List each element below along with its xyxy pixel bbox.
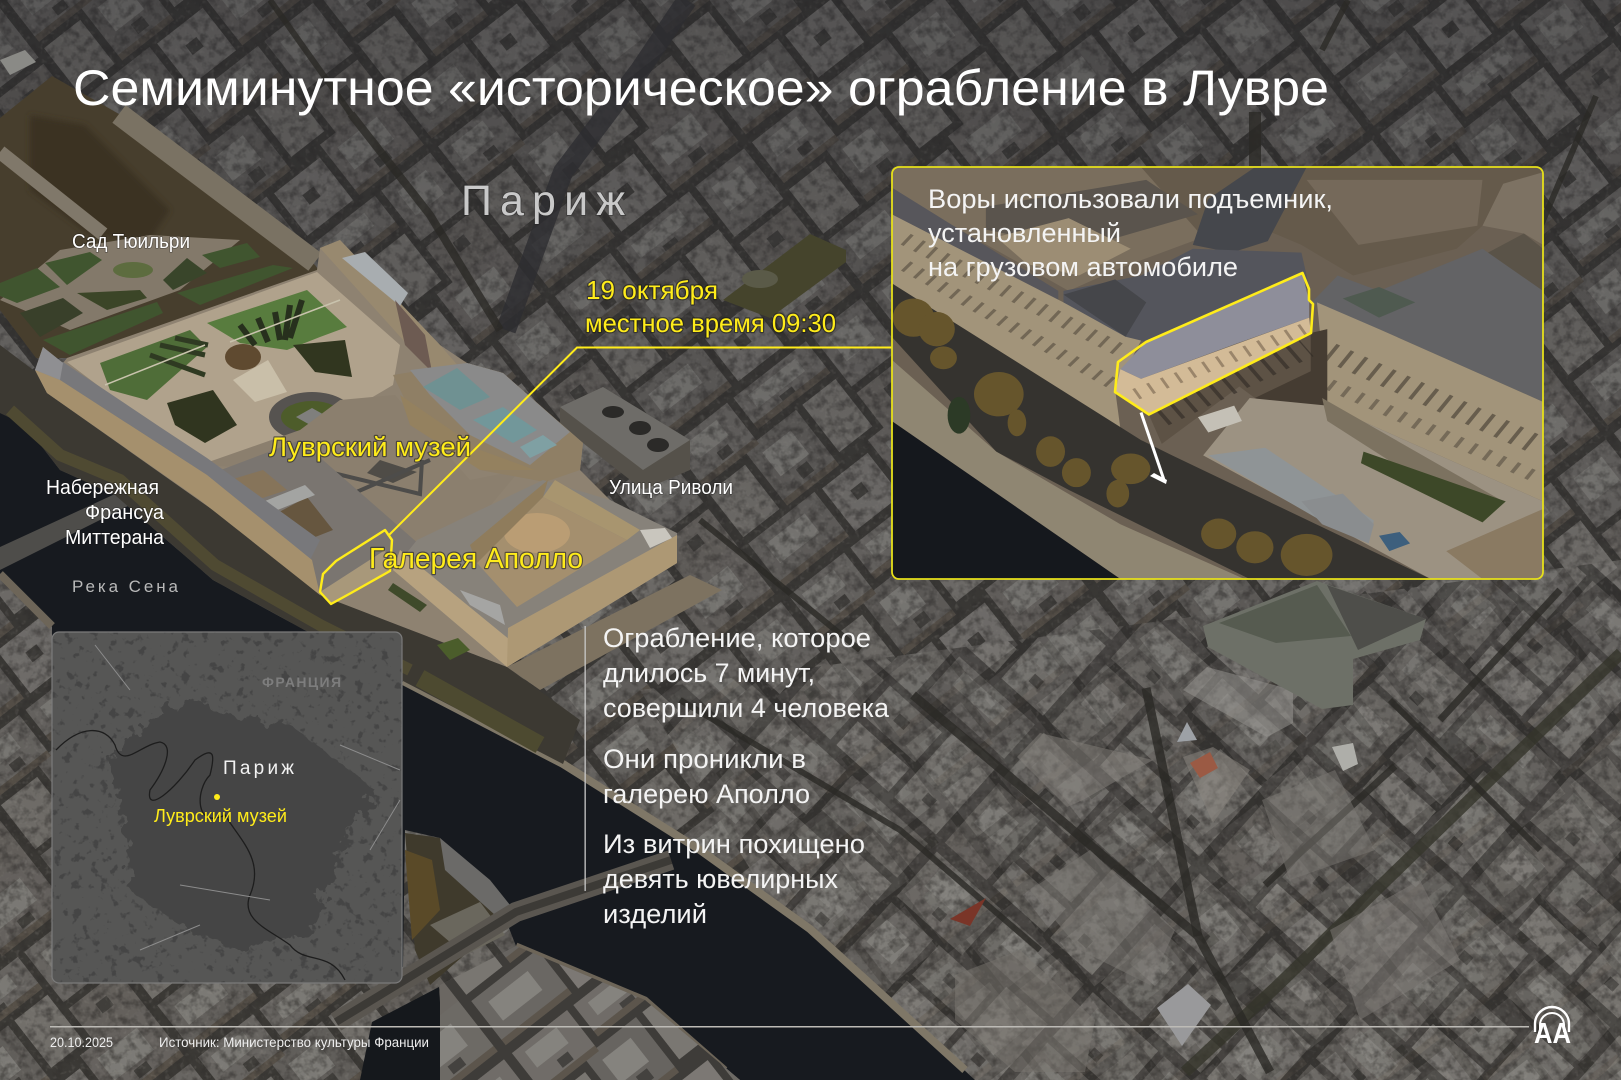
label: Quai Francois Mitterrand: Миттерана [65, 527, 165, 549]
Louvre museum complex [35, 240, 677, 667]
footer rule [50, 1026, 1529, 1028]
inset label: France: ФРАНЦИЯ [262, 674, 341, 690]
Tuileries garden [0, 50, 320, 358]
text block: robbery facts [603, 623, 890, 929]
fact: entered the gallery: галерею Аполло [603, 779, 810, 809]
panel caption: на грузовом автомобиле [928, 252, 1238, 282]
Island Cite with Pont Neuf [336, 833, 740, 1080]
label: Apollo gallery: Галерея Аполло [369, 543, 583, 575]
Apollo gallery outline on the map [320, 530, 392, 604]
label: Quai Francois Mitterrand [46, 477, 165, 549]
panel caption: Воры использовали подъемник, [928, 184, 1333, 214]
Denon courts [213, 440, 420, 595]
label: Quai Francois Mitterrand: Набережная [46, 477, 159, 499]
white arrow to the truck lift [1141, 412, 1167, 484]
icon: Anadolu Agency logo: AA [1534, 1018, 1571, 1050]
Apollo gallery lit facade [1115, 318, 1311, 414]
Palais Royal garden [723, 234, 846, 318]
north wing [320, 240, 460, 372]
fact: duration and number of people: длилось 7 минут, [603, 658, 815, 688]
panel border [892, 167, 1543, 579]
Apollo gallery outline [1115, 273, 1313, 414]
panel: Apollo gallery close-up [892, 167, 1543, 579]
Carrousel gardens and sand [67, 272, 400, 470]
label: Paris: Париж [461, 177, 625, 225]
Grand Gallery wing [35, 347, 390, 604]
close-up aerial photo [892, 167, 1543, 579]
date and time callout: местное время 09:30 [585, 308, 836, 338]
fact: stolen jewels: изделий [603, 899, 707, 929]
large grey building near Rue de Rivoli [560, 387, 690, 490]
title: Семиминутное «историческое» ограбление в Лувре [73, 60, 1329, 116]
inset marker: Louvre [214, 794, 220, 800]
label: Louvre museum: Луврский музей [269, 432, 471, 462]
label: Quai Francois Mitterrand: Франсуа [85, 502, 165, 524]
divider next to the text block [584, 626, 586, 891]
fact: duration and number of people [603, 623, 890, 723]
fact: duration and number of people: совершили 4 человека [603, 693, 890, 723]
small coloured and white roofs [950, 722, 1358, 1046]
footer: source: Источник: Министерство культуры Франции [159, 1035, 429, 1050]
inset map of the Paris region [52, 632, 402, 983]
fact: entered the gallery: Они проникли в [603, 744, 806, 774]
panel caption: установленный [928, 218, 1121, 248]
bridge upper-left [0, 488, 140, 570]
fact: stolen jewels: Из витрин похищено [603, 829, 865, 859]
Apollo gallery roof [1120, 273, 1309, 379]
icon: Anadolu Agency logo [1534, 1007, 1571, 1050]
date and time callout [585, 275, 836, 338]
label: Rue de Rivoli: Улица Риволи [609, 477, 733, 499]
Cour Napoleon with pyramid [200, 395, 520, 545]
date and time callout: 19 октября [586, 275, 718, 305]
inset label: Louvre: Луврский музей [154, 806, 287, 826]
label: Tuileries garden: Сад Тюильри [72, 231, 190, 253]
Cour Carree [393, 480, 677, 667]
footer: date: 20.10.2025 [50, 1035, 113, 1050]
river Seine [0, 413, 975, 1080]
panel caption [928, 184, 1333, 282]
fact: entered the gallery [603, 744, 810, 809]
fact: stolen jewels [603, 829, 865, 929]
label: Seine river: Река Сена [72, 577, 179, 596]
north quay with trees [0, 345, 722, 764]
Richelieu wing with glass roofs [393, 363, 583, 482]
fact: stolen jewels: девять ювелирных [603, 864, 838, 894]
inset label: Paris: Париж [223, 758, 294, 779]
fact: duration and number of people: Ограбление, которое [603, 623, 871, 653]
Les Halles canopy [1203, 581, 1426, 709]
hand-placed light city blocks [955, 667, 1460, 1072]
Louvre label callout line [388, 348, 892, 536]
